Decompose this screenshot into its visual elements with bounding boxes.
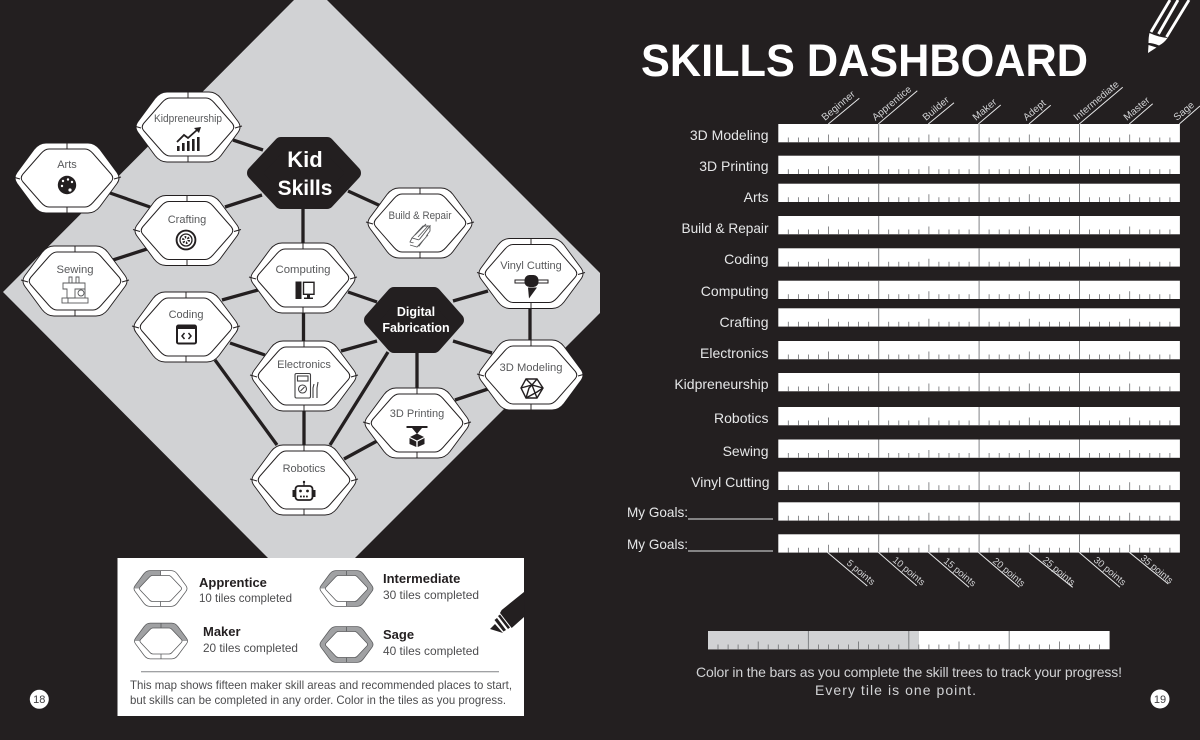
instruction text: Color in the bars as you complete the skill trees to track your progress! bbox=[696, 664, 1122, 680]
rank labels along top of bars: Master bbox=[1122, 95, 1153, 123]
icon: growth chart bbox=[177, 127, 201, 151]
legend note bbox=[130, 678, 512, 707]
hub: Kid Skills: Kid bbox=[287, 147, 323, 172]
row: 3D Modeling: 3D Modeling bbox=[690, 127, 768, 143]
row: Kidpreneurship: Kidpreneurship bbox=[674, 376, 769, 392]
row: Coding bbox=[724, 248, 1180, 267]
hub: Digital Fabrication: Fabrication bbox=[382, 321, 450, 335]
row: My Goals 2: My Goals: bbox=[627, 536, 688, 552]
skill bars bbox=[627, 124, 1180, 553]
row: Sewing: Sewing bbox=[723, 443, 768, 459]
row: Vinyl Cutting bbox=[691, 472, 1180, 490]
instruction text bbox=[696, 664, 1122, 698]
row: My Goals 1 bbox=[627, 502, 1180, 521]
panel: legend bbox=[118, 558, 524, 716]
legend text: Intermediate: Intermediate bbox=[383, 571, 460, 586]
legend text: Apprentice: 10 tiles completed bbox=[199, 591, 292, 605]
point labels below bars: 10 points bbox=[890, 555, 927, 588]
tile: Build & Repair bbox=[366, 188, 474, 258]
legend text: Sage bbox=[383, 627, 479, 658]
legend text: Sage: Sage bbox=[383, 627, 414, 642]
skill tree connectors bbox=[110, 140, 530, 459]
legend hex: Intermediate bbox=[320, 571, 373, 606]
icon: polyhedron bbox=[521, 379, 543, 398]
legend text: Sage: 40 tiles completed bbox=[383, 644, 479, 658]
tile: Vinyl Cutting: Vinyl Cutting bbox=[500, 260, 562, 272]
point labels below bars: 20 points bbox=[990, 556, 1027, 589]
rank labels along top of bars bbox=[820, 79, 1200, 124]
tile: Sewing bbox=[21, 246, 129, 316]
page number 19 bbox=[1150, 690, 1170, 708]
rank labels along top of bars: Apprentice bbox=[870, 84, 914, 123]
tile: 3D Printing bbox=[363, 388, 471, 458]
icon: pencil bbox=[1148, 0, 1189, 53]
hub: Digital Fabrication: Digital bbox=[397, 305, 435, 319]
legend hex: Sage bbox=[320, 627, 373, 662]
icon: multimeter bbox=[295, 374, 318, 398]
icon: vinyl cutter blade bbox=[515, 275, 548, 298]
legend note: but skills can be completed in any order. Color in the tiles as you progress. bbox=[130, 693, 506, 707]
tile: 3D Modeling bbox=[477, 340, 585, 410]
tile: Crafting: Crafting bbox=[168, 214, 206, 226]
icon: lumber stack bbox=[410, 224, 430, 247]
row: Robotics bbox=[714, 407, 1180, 426]
icon: desktop computer bbox=[296, 282, 314, 299]
legend text: Intermediate bbox=[383, 571, 479, 602]
tile: Vinyl Cutting bbox=[477, 238, 585, 308]
tile: 3D Modeling: 3D Modeling bbox=[500, 362, 562, 374]
row: Electronics: Electronics bbox=[700, 345, 768, 361]
rank labels along top of bars: Beginner bbox=[820, 89, 858, 123]
tile: Electronics bbox=[250, 341, 358, 411]
rank labels along top of bars: Adept bbox=[1021, 98, 1049, 123]
rank labels along top of bars: Intermediate bbox=[1072, 79, 1122, 123]
row: Computing: Computing bbox=[701, 283, 768, 299]
point labels below bars: 35 points bbox=[1138, 553, 1175, 586]
tile: Robotics bbox=[250, 445, 358, 515]
row: 3D Printing bbox=[699, 156, 1180, 174]
tile: Robotics: Robotics bbox=[283, 463, 326, 475]
tile: 3D Printing: 3D Printing bbox=[390, 408, 444, 420]
hub: Kid Skills: Skills bbox=[278, 177, 332, 200]
legend text: Apprentice: Apprentice bbox=[199, 575, 267, 590]
row: Arts: Arts bbox=[744, 189, 768, 205]
point labels below bars: 5 points bbox=[844, 558, 877, 588]
legend text: Maker: Maker bbox=[203, 624, 241, 639]
hub: Kid Skills bbox=[254, 144, 354, 202]
point labels below bars bbox=[827, 552, 1175, 589]
tile: Electronics: Electronics bbox=[277, 359, 331, 371]
rank labels along top of bars: Sage bbox=[1172, 100, 1197, 123]
tile: Arts bbox=[13, 143, 121, 213]
legend text: Maker bbox=[203, 624, 298, 655]
row: Crafting bbox=[719, 308, 1180, 330]
legend hex: Maker bbox=[134, 623, 188, 659]
tile: Computing bbox=[249, 243, 357, 313]
tile: Coding bbox=[132, 292, 240, 362]
icon: button bbox=[177, 231, 195, 249]
hub: Digital Fabrication bbox=[371, 294, 457, 346]
page number 19: 19 bbox=[1154, 694, 1166, 706]
legend text: Maker: 20 tiles completed bbox=[203, 641, 298, 655]
icon: printer nozzle and cube bbox=[406, 426, 428, 447]
row: My Goals 1: My Goals: bbox=[627, 504, 688, 520]
icon: palette bbox=[58, 176, 76, 194]
row: Robotics: Robotics bbox=[714, 410, 768, 426]
tile: Arts: Arts bbox=[57, 159, 77, 171]
rank labels along top of bars: Builder bbox=[921, 94, 952, 123]
row: Sewing bbox=[723, 440, 1180, 459]
example progress bar bbox=[708, 631, 1110, 649]
row: 3D Modeling bbox=[690, 124, 1180, 143]
row: Kidpreneurship bbox=[674, 373, 1180, 392]
row: My Goals 2 bbox=[627, 534, 1180, 553]
icon: robot head bbox=[292, 481, 316, 500]
row: Arts bbox=[744, 184, 1180, 205]
row: Coding: Coding bbox=[724, 251, 768, 267]
row: Build & Repair: Build & Repair bbox=[682, 220, 769, 236]
point labels below bars: 30 points bbox=[1091, 555, 1128, 588]
instruction text: Every tile is one point. bbox=[815, 682, 976, 698]
point labels below bars: 15 points bbox=[941, 556, 978, 589]
row: Crafting: Crafting bbox=[719, 314, 768, 330]
tile: Sewing: Sewing bbox=[56, 264, 94, 276]
page number 18: 18 bbox=[33, 694, 45, 706]
title: SKILLS DASHBOARD bbox=[641, 35, 1088, 86]
row: Build & Repair bbox=[682, 216, 1180, 236]
tile: Crafting bbox=[133, 196, 241, 266]
row: Vinyl Cutting: Vinyl Cutting bbox=[691, 474, 770, 490]
row: Electronics bbox=[700, 341, 1180, 361]
tile: Build & Repair: Build & Repair bbox=[388, 210, 452, 222]
legend text: Intermediate: 30 tiles completed bbox=[383, 588, 479, 602]
point labels below bars: 25 points bbox=[1040, 555, 1077, 588]
tile: Computing: Computing bbox=[275, 264, 331, 276]
icon: code window bbox=[177, 325, 196, 344]
tile: Kidpreneurship bbox=[134, 92, 242, 162]
legend text: Apprentice bbox=[199, 575, 292, 605]
rank labels along top of bars: Maker bbox=[971, 97, 1000, 123]
tile: Kidpreneurship: Kidpreneurship bbox=[154, 113, 222, 125]
gray diamond backdrop bbox=[3, 0, 600, 558]
legend note: This map shows fifteen maker skill areas and recommended places to start, bbox=[130, 678, 512, 692]
row: Computing bbox=[701, 281, 1180, 299]
icon: sewing machine bbox=[62, 277, 88, 303]
legend hex: Apprentice bbox=[134, 571, 187, 606]
icon: marker bbox=[490, 592, 524, 633]
row: 3D Printing: 3D Printing bbox=[699, 158, 768, 174]
page number 18 bbox=[30, 690, 49, 709]
tile: Coding: Coding bbox=[169, 309, 203, 321]
